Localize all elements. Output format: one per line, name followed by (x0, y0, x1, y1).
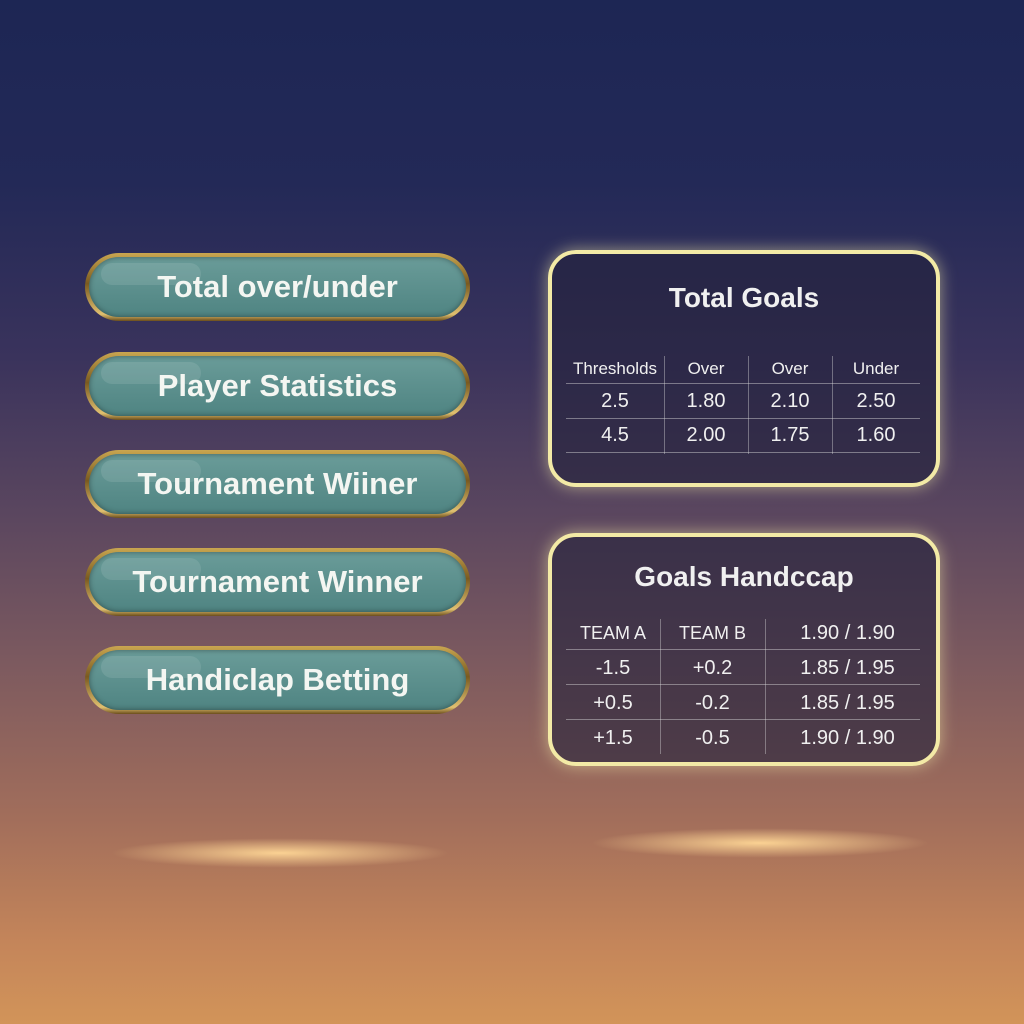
table: total goals odds: 1.80 (687, 390, 725, 412)
button: Tournament Winner (85, 548, 470, 616)
table: handicap odds: -0.5 (695, 727, 730, 749)
table: total goals odds: 2.50 (857, 390, 895, 412)
table: handicap odds: +0.5 (593, 692, 633, 714)
table: total goals odds: 1.75 (771, 424, 809, 446)
table: total goals odds: 2.5 (601, 390, 629, 412)
table: handicap odds: TEAM B (679, 623, 746, 643)
table: total goals odds: Over (772, 359, 808, 378)
heading: Total Goals: Total Goals (669, 282, 819, 313)
table: total goals odds: Over (688, 359, 724, 378)
table: handicap odds: 1.85 / 1.95 (800, 692, 895, 714)
table: total goals odds: 4.5 (601, 424, 629, 446)
table: handicap odds: 1.90 / 1.90 (800, 727, 895, 749)
table: total goals odds: 2.00 (687, 424, 725, 446)
button: Handiclap Betting (85, 646, 470, 714)
panel: Total Goals (548, 250, 940, 487)
button: Player Statistics (85, 352, 470, 420)
button: Total over/under (85, 253, 470, 321)
table: handicap odds: -1.5 (596, 657, 630, 679)
button: Tournament Wiiner (85, 450, 470, 518)
table: total goals odds: 1.60 (857, 424, 895, 446)
glow: right floor light (590, 828, 930, 858)
table: handicap odds: 1.85 / 1.95 (800, 657, 895, 679)
table: handicap odds: +0.2 (693, 657, 732, 679)
heading: Goals Handccap: Goals Handccap (634, 561, 854, 592)
table: handicap odds: 1.90 / 1.90 (800, 622, 895, 644)
table: total goals odds (566, 356, 920, 454)
table: handicap odds: +1.5 (593, 727, 633, 749)
table: total goals odds: Under (853, 359, 899, 378)
table: handicap odds (566, 619, 920, 754)
table: total goals odds: Thresholds (573, 359, 657, 378)
button: Tournament Wiiner: Tournament Wiiner (138, 466, 417, 501)
panel: Goals Handccap (548, 533, 940, 766)
table: total goals odds: 2.10 (771, 390, 809, 412)
glow: left floor light (110, 838, 450, 868)
table: handicap odds: -0.2 (695, 692, 730, 714)
table: handicap odds: TEAM A (580, 623, 646, 643)
button: Total over/under: Total over/under (157, 269, 398, 304)
button: Tournament Winner: Tournament Winner (132, 564, 423, 599)
button: Handiclap Betting: Handiclap Betting (146, 662, 409, 697)
button: Player Statistics: Player Statistics (158, 368, 397, 403)
